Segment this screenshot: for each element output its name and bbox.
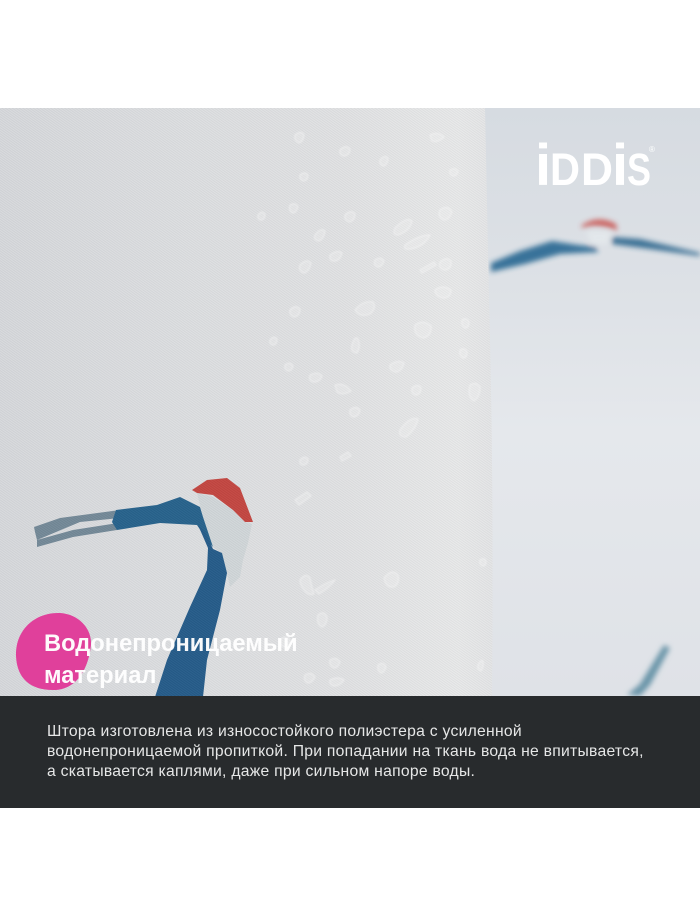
heading: Водонепроницаемый	[44, 631, 298, 657]
description text: Штора изготовлена из износостойкого полиэстера с усиленной	[47, 723, 522, 740]
logo: iDDiS: ®	[649, 145, 655, 154]
curtain fabric	[0, 108, 493, 696]
crane: red cap	[192, 478, 253, 522]
heading	[44, 631, 298, 689]
description text: а скатывается каплями, даже при сильном напоре воды.	[47, 763, 475, 780]
crane: head	[112, 497, 213, 547]
background panel behind curtain	[480, 108, 700, 696]
description text	[47, 723, 644, 780]
description text: водонепроницаемой пропиткой. При попадании на ткань вода не впитывается,	[47, 743, 644, 760]
photo: curtain fabric with water drops and cranes	[0, 108, 700, 696]
water drops	[258, 132, 486, 686]
pink blob accent	[16, 613, 91, 690]
dark description band	[0, 696, 700, 808]
logo: iDDiS	[535, 135, 655, 193]
crane on the curtain	[34, 478, 253, 697]
heading: материал	[44, 663, 156, 689]
blurred crane leg in background	[627, 645, 670, 696]
crane: neck	[155, 525, 227, 697]
crane: white face	[197, 493, 252, 587]
fabric weave over everything	[0, 108, 493, 696]
blurred crane in background	[491, 219, 700, 272]
crane: beak	[34, 510, 120, 547]
